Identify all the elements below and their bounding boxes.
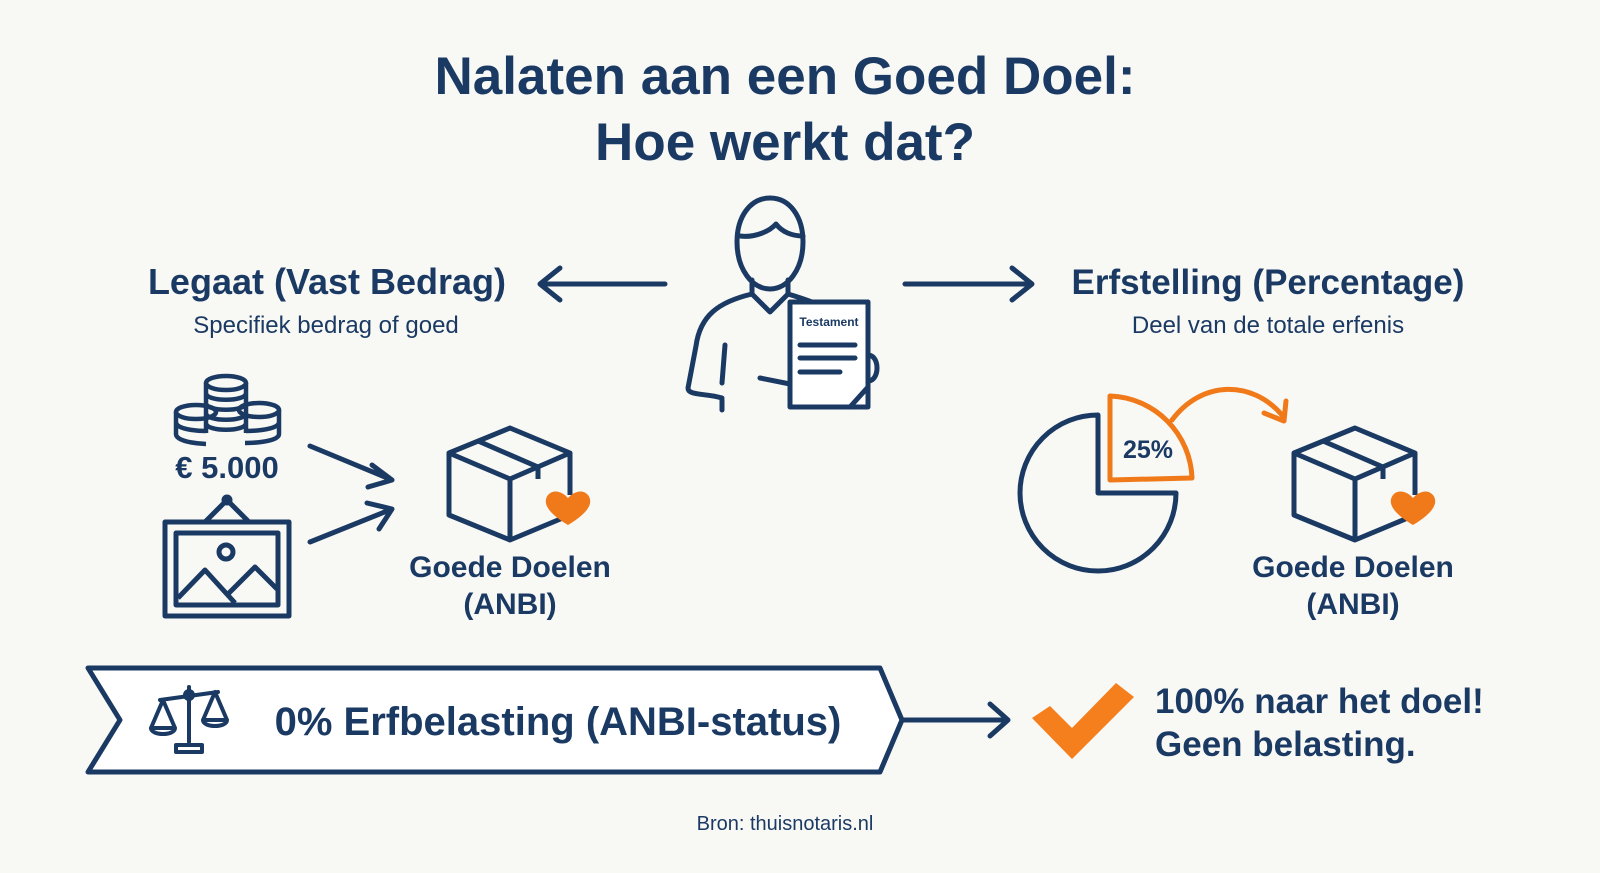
banner text: 0% Erfbelasting (ANBI-status) [275, 700, 841, 744]
label: 25%: 25% [1123, 436, 1173, 464]
title: Hoe werkt dat? [595, 113, 975, 172]
label: goede doelen left: Goede Doelen [409, 551, 611, 584]
pie chart [1020, 389, 1286, 571]
icon: painting [165, 497, 289, 616]
result text: 100% naar het doel! [1155, 682, 1484, 721]
result text [1155, 682, 1484, 764]
heading: legaat: Specifiek bedrag of goed [193, 312, 459, 339]
title: Nalaten aan een Goed Doel: [435, 47, 1135, 106]
title [435, 47, 1135, 172]
heading: erfstelling: Erfstelling (Percentage) [1072, 263, 1464, 302]
label: goede doelen right [1252, 551, 1454, 621]
source: Bron: thuisnotaris.nl [697, 813, 873, 835]
result text: Geen belasting. [1155, 725, 1416, 764]
testament label: Testament [799, 315, 859, 329]
icon: coins [176, 376, 279, 444]
icon: checkmark [1032, 683, 1134, 759]
label: goede doelen right: (ANBI) [1306, 588, 1400, 621]
label: goede doelen right: Goede Doelen [1252, 551, 1454, 584]
label: amount: € 5.000 [175, 450, 279, 485]
arrows to charity [310, 446, 392, 542]
icon: charity box right [1294, 428, 1435, 540]
icon: person with testament [688, 198, 877, 410]
icon: scales [151, 687, 227, 752]
arrow right [905, 268, 1032, 300]
banner: 0% erfbelasting [88, 668, 902, 772]
heading: erfstelling: Deel van de totale erfenis [1132, 312, 1404, 339]
label: goede doelen left: (ANBI) [463, 588, 557, 621]
icon: charity box left [449, 428, 590, 540]
arrow left [540, 268, 665, 300]
heading: legaat [148, 261, 506, 339]
arrow to result [902, 704, 1008, 736]
label: goede doelen left [409, 551, 611, 621]
heading: legaat: Legaat (Vast Bedrag) [148, 261, 506, 302]
heading: erfstelling [1072, 263, 1464, 339]
